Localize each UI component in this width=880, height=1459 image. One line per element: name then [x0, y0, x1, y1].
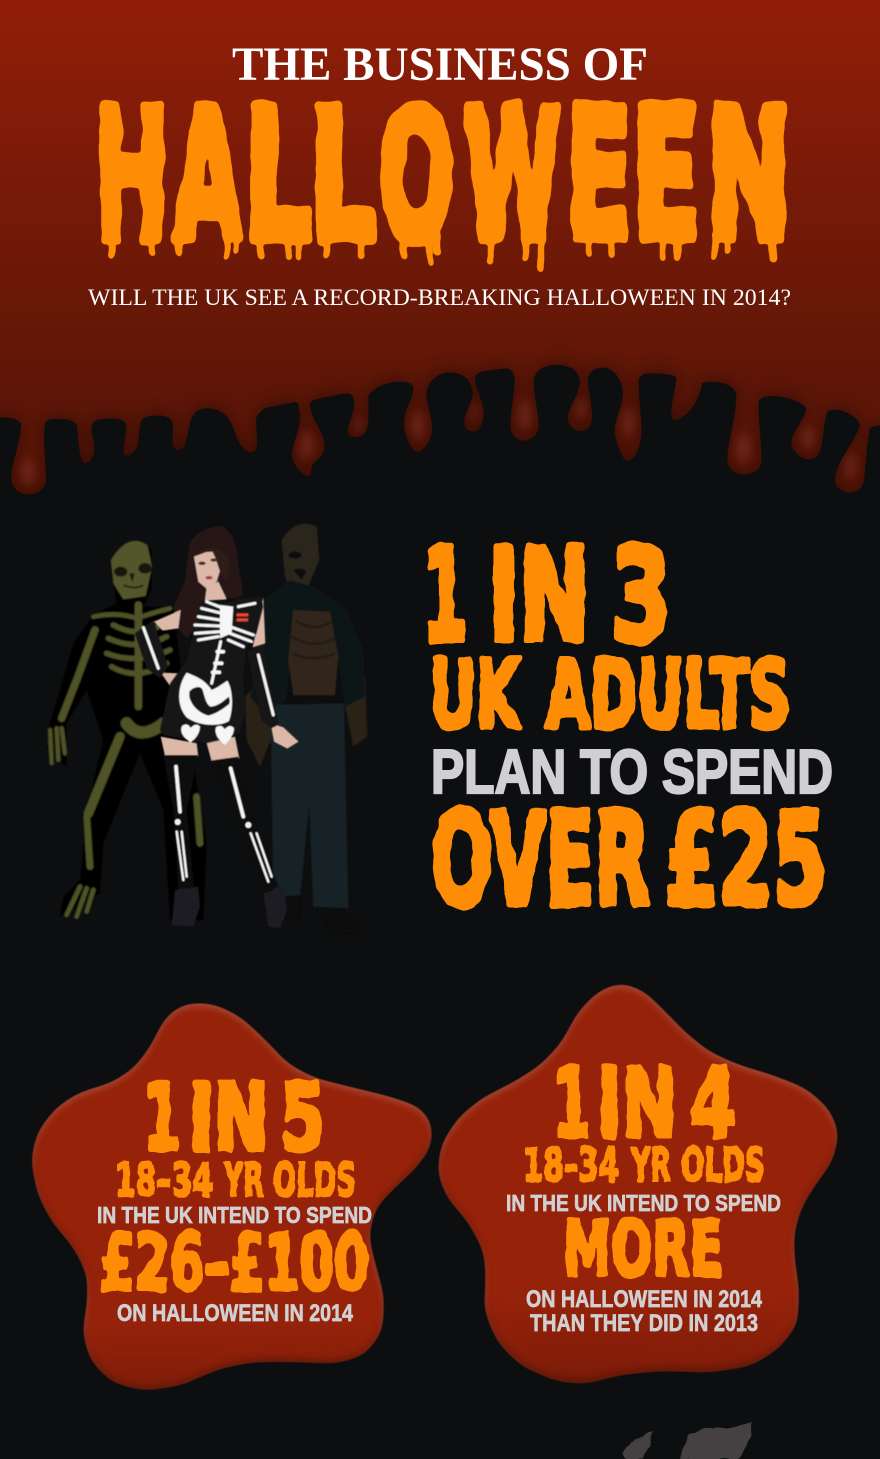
panel: 1 in 4 blob [437, 982, 840, 1385]
headline: 1 in 3: 1 [422, 522, 468, 671]
headline: 18-34 yr olds [523, 1138, 765, 1192]
title: halloween dripping lettering: H [94, 72, 169, 281]
headline: 18-34 yr olds: YR [630, 1138, 671, 1192]
headline: 1 in 5: 5 [280, 1064, 325, 1173]
headline: UK adults: UK [430, 641, 522, 750]
text: than they did in 2013: THAN THEY DID IN 2013 [530, 1310, 758, 1337]
headline: 1 in 3: 3 [611, 522, 671, 671]
title: halloween dripping lettering: O [379, 72, 454, 281]
figure: zombie [245, 524, 367, 934]
text: on Halloween in 2014: ON HALLOWEEN IN 2014 [117, 1300, 353, 1327]
figure: glow skeleton [47, 541, 207, 920]
subtitle: WILL THE UK SEE A RECORD-BREAKING HALLOWEEN IN 2014? [88, 285, 791, 311]
illustration: three costumed figures [47, 524, 367, 934]
dress [160, 597, 263, 743]
title: halloween dripping lettering: L [245, 72, 311, 281]
headline: 18-34 yr olds: OLDS [273, 1153, 356, 1207]
headline: UK adults [430, 641, 790, 750]
headline: 1 in 3 [422, 522, 671, 671]
headline: 1 in 5: 1 [143, 1064, 181, 1173]
hair [173, 526, 243, 638]
headline: 1 in 4 [553, 1048, 736, 1160]
gloves [135, 620, 278, 728]
headline: 1 in 4: 4 [690, 1048, 736, 1160]
shoes [172, 887, 287, 928]
headline: 18-34 yr olds [115, 1153, 356, 1207]
blood header band [0, 0, 880, 517]
headline: 1 in 3: IN [488, 522, 590, 671]
title: the business of: THE BUSINESS OF [232, 38, 648, 91]
statistic: 1 in 3 UK adults plan to spend over 25 pounds [422, 522, 833, 935]
headline: more: MORE [563, 1204, 723, 1293]
title: halloween dripping lettering: L [310, 72, 376, 281]
headline: 1 in 5 [143, 1064, 325, 1173]
headline: over 25 pounds: OVER [431, 786, 650, 935]
headline: 18-34 yr olds: 18–34 [115, 1153, 213, 1207]
headline: 26 to 100 pounds: £26–£100 [100, 1219, 369, 1309]
headline: 18-34 yr olds: OLDS [681, 1138, 765, 1192]
text: in the UK intend to spend: IN THE UK INTEND TO SPEND [506, 1190, 781, 1216]
text: on Halloween in 2014: ON HALLOWEEN IN 2014 [526, 1286, 762, 1313]
title: halloween dripping lettering [94, 72, 791, 281]
skin: face, neck, arms, thighs [154, 550, 299, 762]
panel: 1 in 5 blob [30, 1002, 433, 1392]
title: halloween dripping lettering: N [707, 72, 791, 281]
text: in the UK intend to spend: IN THE UK INTEND TO SPEND [97, 1202, 372, 1228]
headline: 1 in 5: IN [189, 1064, 269, 1173]
title: halloween dripping lettering: E [566, 72, 632, 281]
headline: 1 in 4: 1 [553, 1048, 591, 1160]
title: halloween dripping lettering: E [633, 72, 699, 281]
title: halloween dripping lettering: W [464, 72, 561, 281]
headline: 1 in 4: IN [597, 1048, 677, 1160]
figure: woman in skeleton dress [135, 526, 299, 928]
headline: 18-34 yr olds: 18–34 [523, 1138, 619, 1192]
stockings [163, 755, 278, 892]
title: halloween dripping lettering: A [174, 72, 242, 281]
headline: 18-34 yr olds: YR [223, 1153, 264, 1207]
map fragment: top of Scotland [623, 1422, 752, 1459]
